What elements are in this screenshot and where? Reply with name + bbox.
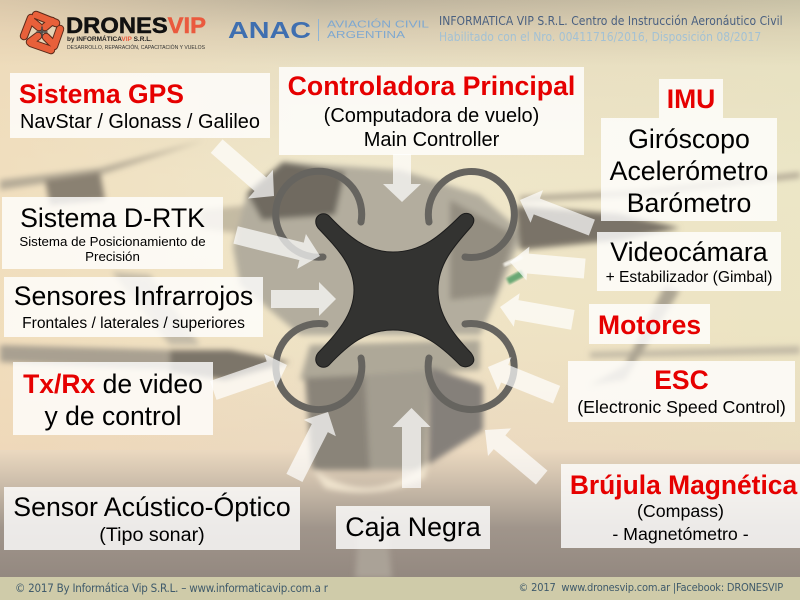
panel: Controladora Principal: Main Controller (364, 129, 499, 151)
panel: IMU sensors: Acelerómetro (610, 156, 768, 186)
panel: Brujula Magnetica: - Magnetómetro - (612, 524, 749, 544)
wordmark subtitle: by INFORMÁTICAVIP S.R.L. (67, 34, 152, 43)
panel: Sistema D-RTK (2, 197, 223, 269)
panel: Sistema GPS: Sistema GPS (19, 79, 184, 109)
logo: ANAC (228, 17, 430, 43)
logo: ANAC: ANAC (228, 17, 311, 43)
logo: ANAC: ARGENTINA (327, 30, 405, 41)
panel: Sistema GPS (10, 73, 270, 138)
panel: Videocamara: Videocámara (610, 237, 768, 267)
panel: IMU sensors: Giróscopo (628, 124, 750, 154)
footer text right: © 2017 www.dronesvip.com.ar |Facebook: DRONESVIP (519, 581, 783, 594)
arrow: D-RTK (231, 217, 324, 273)
logo: DronesVIP (20, 10, 206, 54)
footer bar (0, 577, 800, 600)
panel: IMU sensors (601, 118, 777, 221)
arrow: IMU (514, 184, 598, 244)
panel: Sistema D-RTK: Sistema de Posicionamiento de (19, 234, 206, 249)
panel: IMU heading (659, 79, 723, 118)
logo: ANAC: AVIACIÓN CIVIL (327, 18, 430, 30)
arrow: GPS (204, 132, 286, 210)
panel: ESC: ESC (654, 365, 709, 395)
arrow: motores (497, 290, 576, 337)
panel: ESC: (Electronic Speed Control) (577, 397, 786, 417)
footer text left: © 2017 By Informática Vip S.R.L. – www.informaticavip.com.a r (15, 581, 328, 595)
panel: Brujula Magnetica (561, 464, 800, 548)
tagline: DESARROLLO, REPARACIÓN, CAPACITACIÓN Y VUELOS (67, 44, 206, 51)
panel: Videocamara (597, 232, 781, 291)
panel: IMU heading: IMU (667, 84, 715, 114)
panel: Sensores Infrarrojos: Sensores Infrarrojos (14, 281, 253, 311)
arrow: caja negra (392, 408, 430, 488)
arrow: sensor acustico (278, 404, 344, 486)
panel: Caja Negra: Caja Negra (345, 512, 481, 542)
panel: Sistema D-RTK: Sistema D-RTK (20, 203, 205, 233)
panel: Tx/Rx: y de control (44, 401, 182, 431)
panel: Sistema D-RTK: Precisión (85, 249, 140, 264)
arrow: controladora (383, 154, 421, 202)
panel: Tx/Rx (13, 362, 213, 435)
panel: Sensores Infrarrojos (4, 277, 263, 337)
panel: Sistema GPS: NavStar / Glonass / Galileo (20, 111, 260, 133)
panel: Tx/Rx: Tx/Rx de video (23, 369, 203, 399)
panel: Brujula Magnetica: (Compass) (637, 501, 724, 521)
header text line 1: INFORMATICA VIP S.R.L. Centro de Instrucción Aeronáutico Civil (439, 14, 783, 28)
panel: Sensores Infrarrojos: Frontales / laterales / superiores (22, 315, 245, 332)
header text line 2: Habilitado con el Nro. 00411716/2016, Disposición 08/2017 (439, 30, 761, 44)
panel: IMU sensors: Barómetro (627, 188, 751, 218)
panel: Videocamara: + Estabilizador (Gimbal) (606, 269, 772, 286)
panel: Controladora Principal: Controladora Principal (288, 71, 575, 101)
arrow: Tx/Rx (207, 348, 293, 407)
panel: Controladora Principal (279, 67, 584, 155)
panel: Sensor Acustico-Optico (4, 487, 300, 550)
arrow: ESC (481, 350, 563, 411)
panel: Controladora Principal: (Computadora de vuelo) (324, 105, 539, 127)
icon: orange propeller emblem (24, 15, 60, 50)
panel: Sensor Acustico-Optico: (Tipo sonar) (99, 524, 205, 546)
arrow: infrarrojos (271, 282, 336, 316)
panel: ESC (568, 361, 795, 422)
panel: Sensor Acustico-Optico: Sensor Acústico-Óptico (13, 492, 291, 522)
arrow: videocamara (509, 245, 586, 285)
panel: Brujula Magnetica: Brújula Magnética (570, 470, 797, 500)
panel: Motores: Motores (598, 310, 701, 340)
rotor arcs (276, 171, 514, 410)
arrow: brujula (473, 416, 553, 491)
drone body (316, 213, 474, 367)
panel: Caja Negra (336, 506, 490, 549)
wordmark: DRONES VIP (66, 13, 206, 38)
panel: Motores (589, 304, 710, 344)
